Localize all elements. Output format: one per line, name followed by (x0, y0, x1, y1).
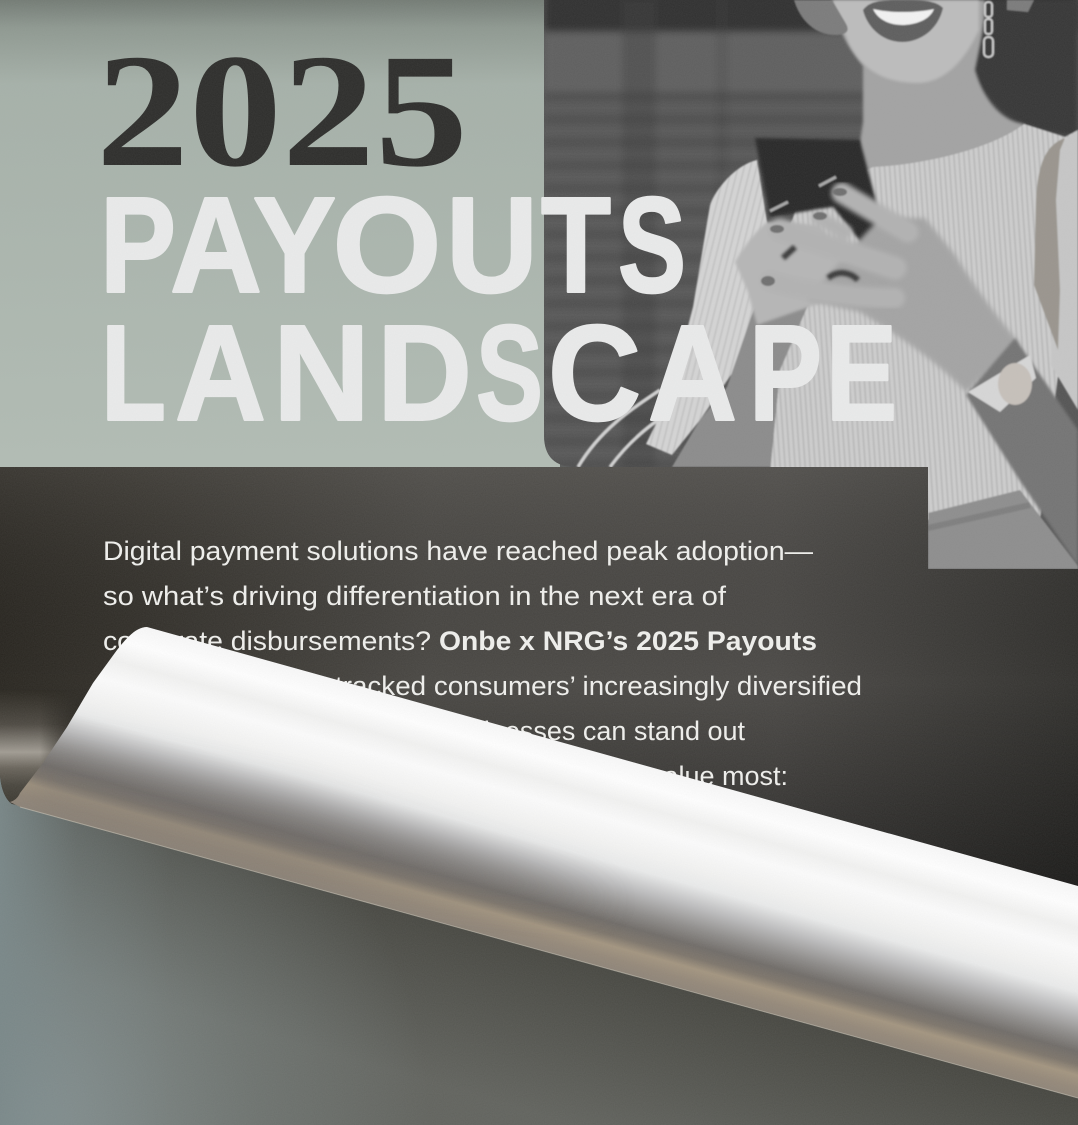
title: LANDSCAPE: L (101, 297, 166, 449)
forearm right (966, 338, 1078, 566)
floor background (0, 775, 1078, 1125)
title: PAYOUTS: U (446, 169, 538, 321)
roll lower edge (20, 807, 1078, 1098)
intro text block: Onbe x NRG’s 2025 Payouts (439, 626, 817, 656)
skirt (928, 490, 1078, 569)
title: LANDSCAPE: S (476, 297, 543, 449)
bag strap (1034, 138, 1065, 350)
title: PAYOUTS: O (332, 169, 442, 321)
floor left edge light (0, 775, 170, 1125)
title: LANDSCAPE: E (826, 297, 897, 449)
title: PAYOUTS: T (541, 169, 611, 321)
intro text block: tracked consumers’ increasingly diversified (335, 671, 862, 701)
intro text block: Digital payment solutions have reached peak adoption— (103, 536, 813, 566)
earring (984, 2, 993, 57)
title: PAYOUTS: A (170, 169, 262, 321)
roll left shading (26, 738, 550, 894)
title: PAYOUTS: P (100, 169, 176, 321)
panel: sage title background (0, 0, 560, 467)
title: PAYOUTS: S (618, 169, 686, 321)
intro text block (103, 536, 862, 791)
intro text block: so what’s driving differentiation in the next era of (103, 581, 727, 611)
face (832, 0, 979, 83)
title: 2025: 2025 (96, 22, 468, 201)
intro text block: businesses can stand out (440, 716, 745, 746)
panel: dark intro background (0, 467, 1078, 900)
back of right hand (807, 218, 1020, 392)
nails (761, 188, 847, 286)
title: LANDSCAPE: A (648, 297, 737, 449)
headphones (794, 0, 848, 35)
title: LANDSCAPE: D (377, 297, 472, 449)
curl underside highlight (0, 696, 70, 804)
title: PAYOUTS: Y (253, 169, 336, 321)
mouth (863, 0, 943, 42)
phone (755, 138, 882, 250)
title: LANDSCAPE: N (273, 297, 370, 449)
fingers (770, 193, 908, 298)
neck (832, 0, 1024, 175)
title: LANDSCAPE: A (175, 297, 266, 449)
shirt (760, 124, 1078, 520)
left hand (734, 220, 839, 325)
watch (968, 355, 1036, 412)
phone highlights (770, 177, 836, 211)
intro text block: corporate disbursements? (103, 626, 431, 656)
floor far light (0, 775, 1078, 1125)
title: LANDSCAPE: C (548, 297, 641, 449)
right sleeve (1051, 130, 1078, 410)
title: LANDSCAPE: P (749, 297, 822, 449)
left forearm (672, 300, 808, 467)
skirt waistband (928, 505, 1030, 528)
floor corner light (0, 775, 1078, 1125)
left sleeve (646, 160, 770, 455)
dark panel shading (0, 467, 1078, 900)
hair (970, 0, 1078, 137)
finger gaps (783, 247, 858, 280)
peeling paper roll (10, 627, 1078, 1098)
intro text block: value most: (650, 761, 788, 791)
bag handles (578, 390, 672, 467)
photo: smiling woman holding a phone (544, 0, 1078, 569)
